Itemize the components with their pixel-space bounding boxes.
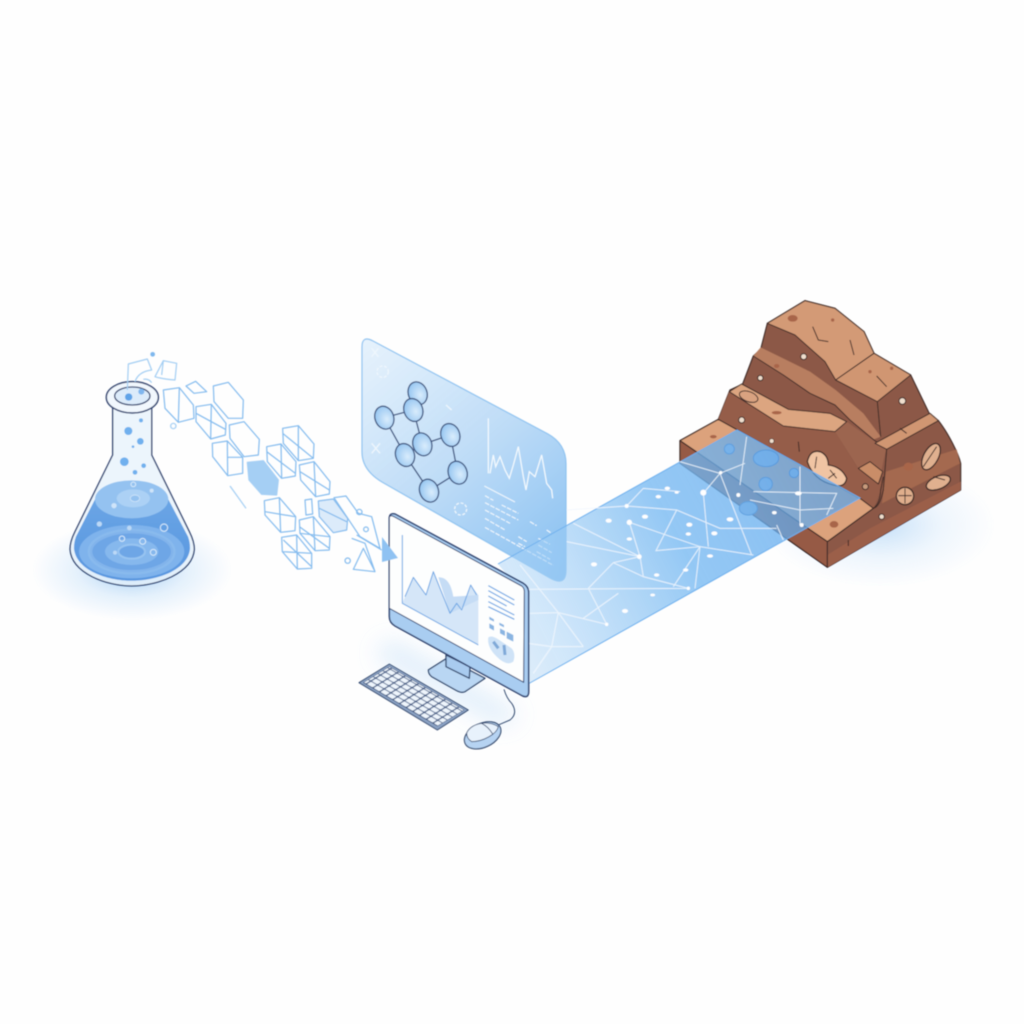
right face bands (882, 449, 960, 503)
panel text lines (484, 486, 553, 565)
panel line chart (488, 418, 553, 498)
embedded fossils under beam (724, 444, 799, 515)
base front (680, 441, 827, 567)
terrain block (680, 301, 961, 567)
data beam (498, 430, 860, 684)
monitor stand (428, 655, 485, 692)
right ledge (875, 413, 938, 449)
beam nodes (591, 471, 804, 626)
surface cracks and pits (710, 315, 913, 546)
glow under flask (32, 520, 232, 620)
scene (32, 301, 995, 754)
floating molecule panel (362, 339, 566, 581)
small ledge (858, 462, 883, 484)
fossils (738, 354, 952, 519)
bubbles (120, 418, 146, 475)
arrow into monitor (382, 537, 398, 562)
flask (70, 382, 194, 586)
beam edges (498, 430, 860, 684)
monitor screen (389, 516, 524, 682)
base top (680, 419, 873, 542)
beam plane (498, 430, 860, 684)
flask glass (70, 407, 194, 586)
keyboard (359, 664, 468, 730)
mouse (460, 716, 505, 754)
wisps above flask (127, 352, 246, 508)
mouse cable (497, 689, 515, 726)
mid ledge (729, 384, 847, 432)
hexagon data stream (127, 352, 382, 572)
glow under terrain (765, 463, 995, 587)
decorative sparkles (372, 348, 467, 515)
screen chart (402, 535, 478, 645)
monitor body (389, 514, 529, 697)
panel glass (362, 339, 566, 581)
beam network (520, 437, 837, 673)
flask rim (106, 382, 158, 413)
screen mini bars (489, 617, 513, 642)
computer (359, 514, 529, 754)
glow under keyboard (375, 640, 520, 725)
top surface (767, 301, 874, 380)
liquid (74, 480, 190, 581)
rock strata (753, 347, 881, 439)
rock body (680, 301, 961, 567)
hexagon cells (163, 381, 382, 572)
upper cliff edges (753, 356, 887, 508)
screen text lines (488, 586, 514, 619)
molecule (372, 348, 470, 515)
screen oval badge (488, 637, 514, 663)
